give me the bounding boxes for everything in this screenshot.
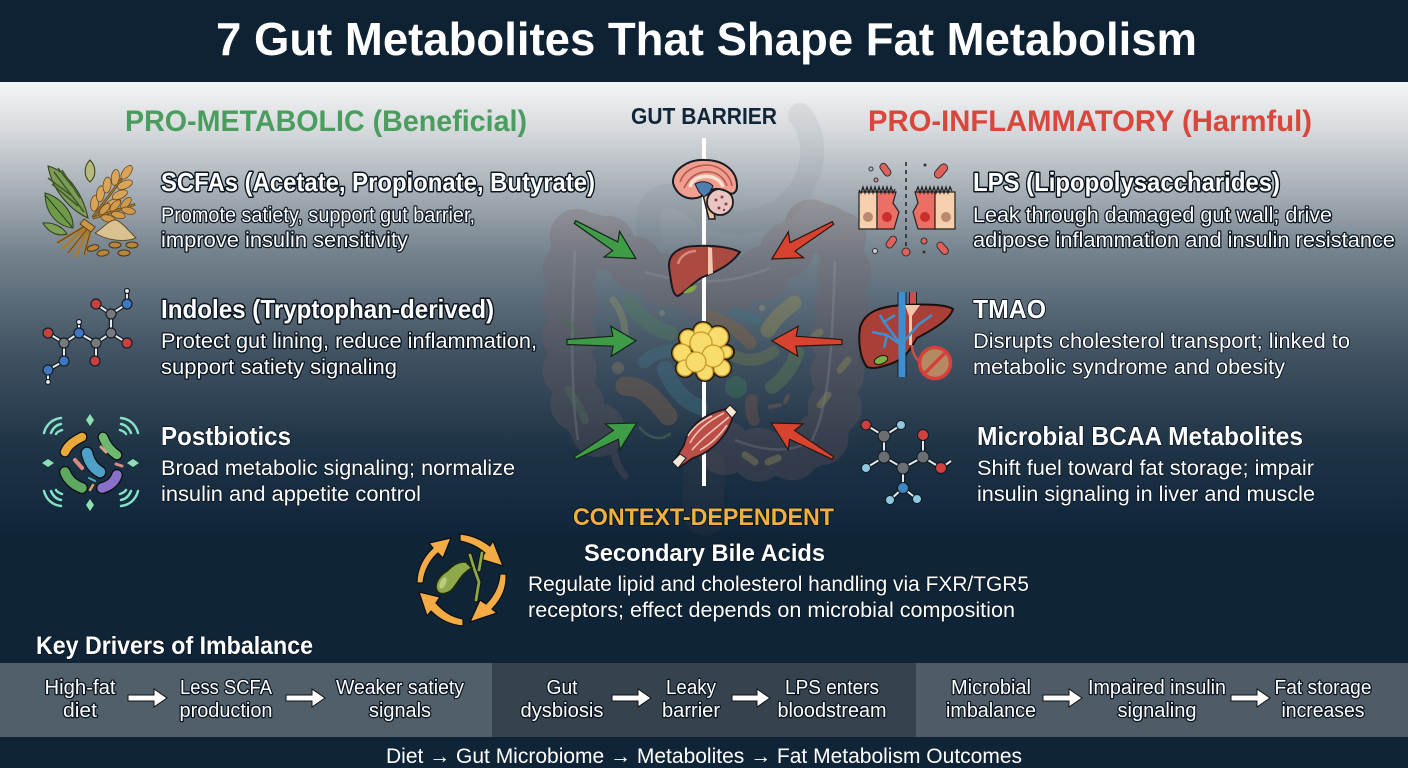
text: LPS: adipose inflammation and insulin resistance [973,229,1395,252]
panel: driver chain 3: Microbial [951,677,1031,699]
heading: key drivers: Key Drivers of Imbalance [36,632,313,660]
text: indoles: support satiety signaling [161,356,397,379]
panel: driver chain 2: bloodstream [778,700,886,722]
text: indoles: Indoles (Tryptophan-derived) [161,294,494,324]
icon: muscle [672,405,737,468]
text: secondary bile acids: Regulate lipid and cholesterol handling via FXR/TGR5 [528,573,1029,596]
text: SCFAs: SCFAs (Acetate, Propionate, Butyrate) [161,167,595,197]
text: indoles: Protect gut lining, reduce inflammation, [161,330,537,353]
arrow: red to liver [764,210,841,272]
icon: postbiotics bacteria [42,414,139,511]
panel: driver chain 3: Impaired insulin [1088,677,1226,699]
gut barrier line [702,138,706,486]
panel: driver chain 2: Gut [546,677,578,699]
icon: indole molecule [43,288,132,384]
panel: driver chain 1: Less SCFA [180,677,273,699]
text: indoles [161,294,537,379]
text: BCAA metabolites: Microbial BCAA Metabolites [977,421,1303,451]
heading: pro-inflammatory: PRO-INFLAMMATORY (Harmful) [868,105,1312,138]
text: LPS [973,167,1395,252]
text: postbiotics: insulin and appetite control [161,483,421,506]
panel: driver chain 3: imbalance [946,700,1036,722]
panel: driver chain 2: Leaky [666,677,716,699]
text: BCAA metabolites [977,421,1315,506]
text: LPS: LPS (Lipopolysaccharides) [973,167,1280,197]
title banner [0,0,1408,82]
arrow: red to muscle [764,410,840,471]
arrow: green to muscle [568,410,644,471]
icon: fat cells [672,322,734,381]
background illustration: intestines and microbes [565,115,848,515]
arrow: green to fat [567,326,636,357]
icon: liver with blocked cholesterol [859,292,953,378]
panel: driver chain 3 [916,663,1408,737]
panel: driver chain 1: production [180,700,272,722]
text: BCAA metabolites: Shift fuel toward fat storage; impair [977,457,1314,480]
panel: driver chain 1: High-fat [44,677,116,699]
icon: leaky gut cells [859,162,955,256]
panel: driver chain 2: dysbiosis [520,700,604,722]
arrow: green to liver [567,209,644,271]
icon: BCAA molecule [861,420,951,504]
title banner: 7 Gut Metabolites That Shape Fat Metabolism [216,13,1197,65]
text: SCFAs [161,167,595,252]
icon: wheat and fiber [43,157,144,257]
icon: gallbladder cycle [417,534,506,626]
text: TMAO [973,294,1350,379]
panel: driver chain 2 [492,663,916,737]
text: postbiotics: Postbiotics [161,421,291,451]
icon: liver [669,246,740,296]
heading: context-dependent: CONTEXT-DEPENDENT [573,504,834,531]
panel: driver chain 1: diet [63,700,97,722]
text: LPS: Leak through damaged gut wall; drive [973,204,1332,227]
panel: driver chain 1 [0,663,492,737]
footer flow text: Diet → Gut Microbiome → Metabolites → Fat Metabolism Outcomes [386,745,1022,768]
arrow: red to fat [772,326,842,357]
panel: driver chain 1: Weaker satiety [336,677,464,699]
heading: pro-metabolic: PRO-METABOLIC (Beneficial) [125,105,527,138]
text: SCFAs: improve insulin sensitivity [161,229,409,252]
panel: driver chain 3: signaling [1118,700,1196,722]
heading: gut barrier: GUT BARRIER [631,103,777,129]
panel: driver chain 2: LPS enters [785,677,879,699]
text: TMAO: Disrupts cholesterol transport; linked to [973,330,1350,353]
text: TMAO: metabolic syndrome and obesity [973,356,1286,379]
text: SCFAs: Promote satiety, support gut barrier, [161,204,475,227]
text: secondary bile acids: Secondary Bile Acids [584,540,825,567]
text: secondary bile acids: receptors; effect depends on microbial composition [528,599,1015,622]
panel: driver chain 3: Fat storage [1274,677,1372,699]
text: postbiotics [161,421,515,506]
text: secondary bile acids [528,540,1029,622]
panel: driver chain 1: signals [369,700,431,722]
text: BCAA metabolites: insulin signaling in liver and muscle [977,483,1315,506]
main gradient panel [0,82,1408,532]
panel: driver chain 2: barrier [662,700,720,722]
text: TMAO: TMAO [973,294,1046,324]
icon: brain [673,160,737,219]
text: postbiotics: Broad metabolic signaling; normalize [161,457,515,480]
panel: driver chain 3: increases [1282,700,1364,722]
